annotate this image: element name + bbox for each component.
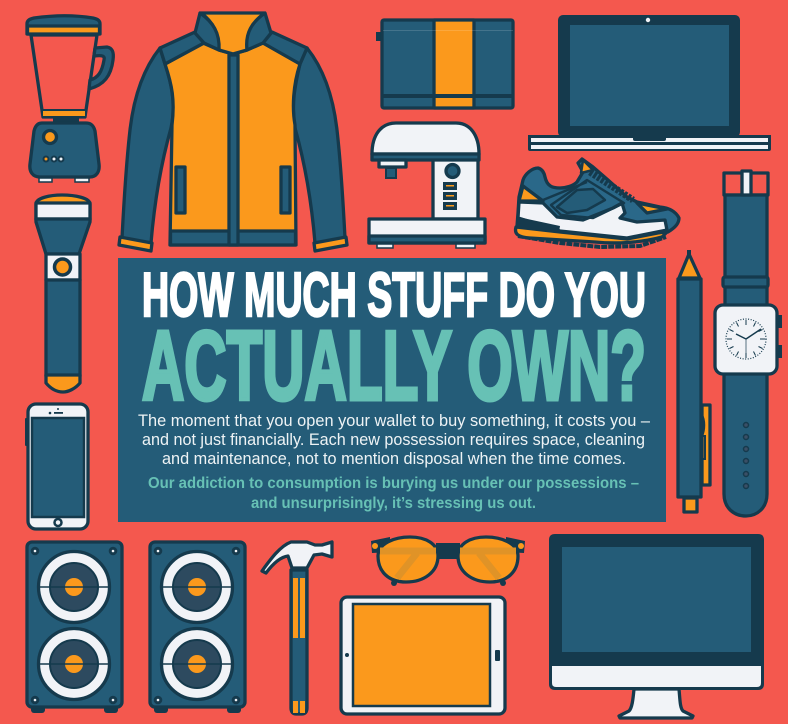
text block: intro paragraph: and maintenance, not to mention disposal when the time comes.	[162, 450, 626, 468]
icon: coffee machine	[369, 123, 485, 248]
clock face	[726, 319, 766, 359]
text block: intro paragraph: and not just financially. Each new possession requires space, cleaning	[142, 431, 645, 449]
text block: intro paragraph	[138, 412, 651, 468]
icon: wallet	[376, 20, 513, 108]
icon: wristwatch	[715, 171, 782, 516]
icon: flashlight	[36, 195, 90, 392]
text block: intro paragraph: The moment that you open your wallet to buy something, it costs you –	[138, 412, 651, 430]
icon: left speaker	[27, 542, 122, 713]
icon: jacket	[119, 13, 347, 251]
text block: teal callout: and unsurprisingly, it’s stressing us out.	[251, 495, 536, 512]
icon: pen	[678, 250, 710, 512]
icon: laptop	[528, 15, 771, 151]
icon: smartphone	[25, 404, 88, 529]
text block: teal callout: Our addiction to consumption is burying us under our possessions –	[148, 475, 639, 492]
icon: sneaker	[516, 159, 679, 247]
icon: blender	[27, 16, 113, 182]
icon: right speaker	[150, 542, 245, 713]
icon: tablet	[341, 597, 505, 714]
icon: desktop monitor	[549, 534, 764, 718]
text block: teal callout	[148, 475, 639, 512]
icon: hammer	[262, 542, 332, 714]
panel: title block	[118, 258, 666, 522]
icon: sunglasses	[371, 537, 525, 586]
